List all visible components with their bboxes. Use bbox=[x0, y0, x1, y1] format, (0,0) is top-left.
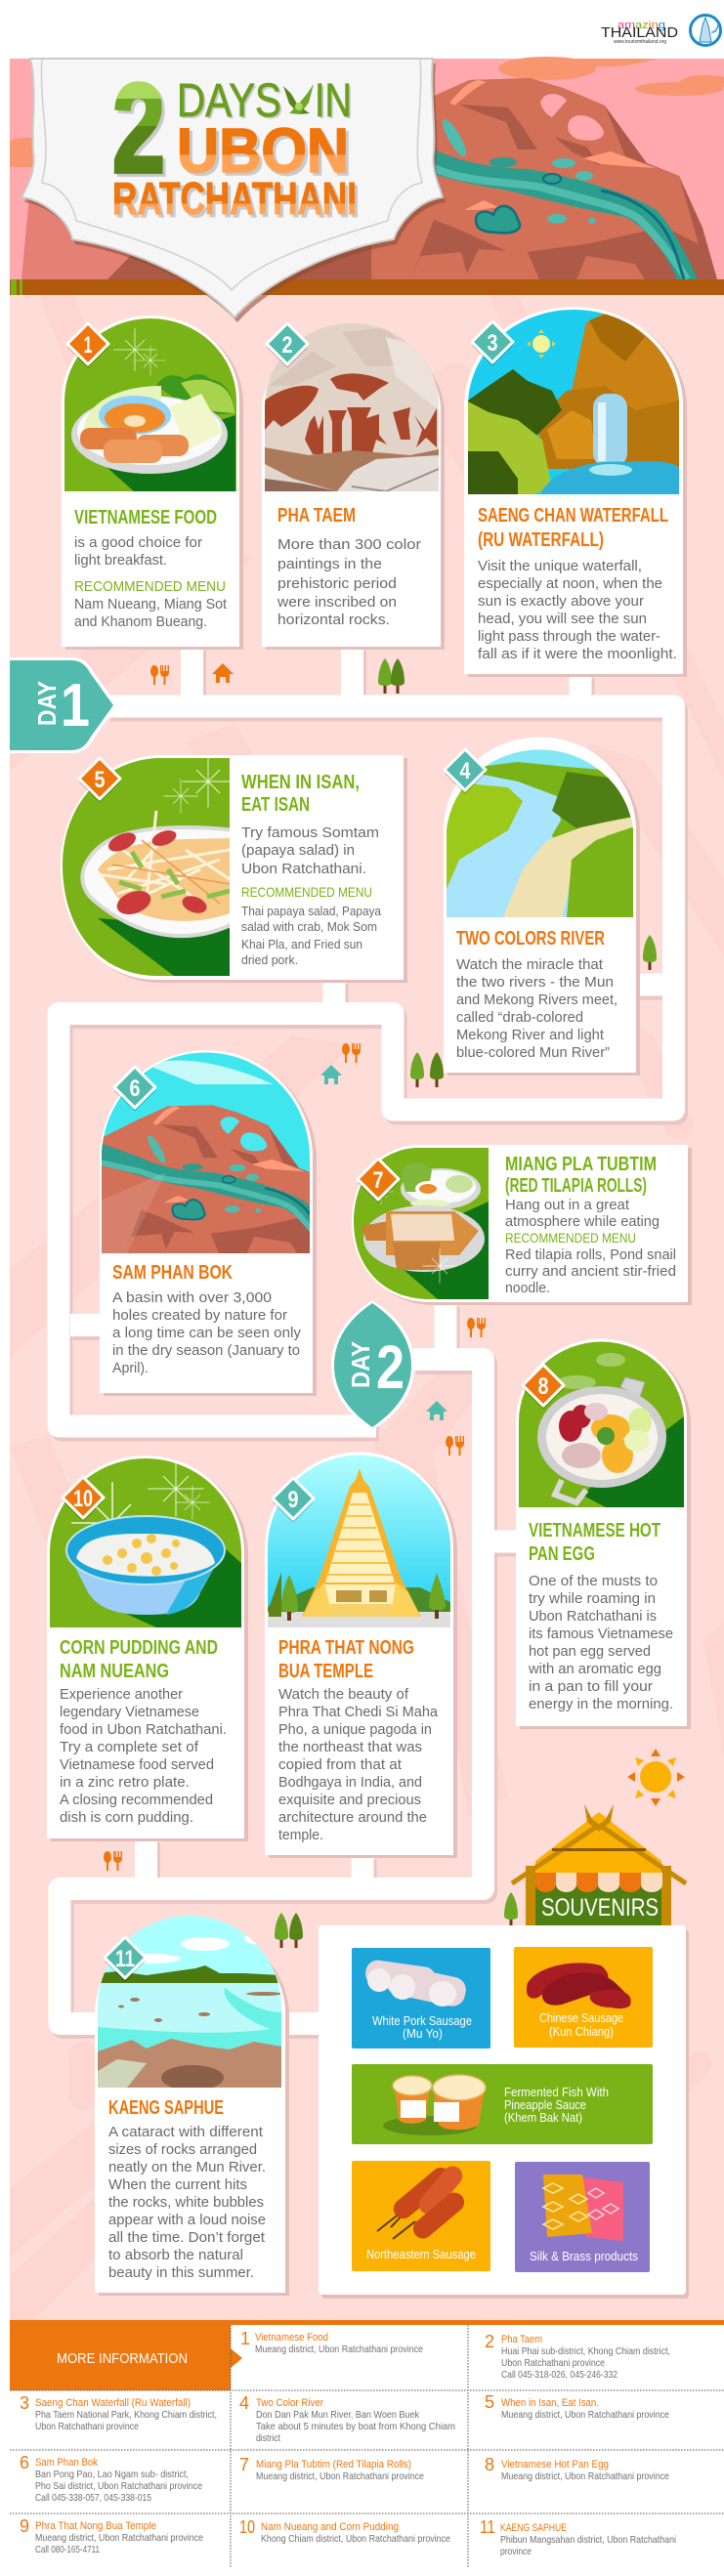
item 2: Call 045-318-026, 045-246-332 bbox=[501, 2369, 618, 2381]
item 4: district bbox=[256, 2432, 280, 2444]
body: all the time. Don’t forget bbox=[108, 2230, 265, 2246]
body bbox=[278, 1687, 439, 1843]
heading: TWO COLORS RIVER bbox=[456, 928, 605, 950]
icon: house 3 bbox=[426, 1401, 447, 1420]
body: light pass through the water- bbox=[478, 629, 660, 645]
badge 5: 5 bbox=[94, 767, 106, 793]
icon: trees 3 bbox=[275, 1913, 303, 1948]
item 3: Ubon Ratchathani province bbox=[35, 2421, 139, 2432]
amazing thailand logo: www.tourismthailand.org bbox=[614, 39, 666, 45]
panel: card 1 Vietnamese food bbox=[59, 313, 244, 650]
item 7: 7 bbox=[239, 2455, 249, 2474]
item 10: 10 bbox=[239, 2517, 255, 2537]
tile: northeastern sausage: Northeastern Sausage bbox=[366, 2247, 476, 2261]
item 7: Miang Pla Tubtim (Red Tilapia Rolls) bbox=[256, 2459, 411, 2470]
left rock bbox=[21, 195, 293, 279]
icon: house 1 bbox=[212, 663, 234, 683]
item 6: Pho Sai district, Ubon Ratchathani province bbox=[35, 2480, 202, 2492]
item 9: Mueang district, Ubon Ratchathani province bbox=[35, 2532, 203, 2544]
item 4: Take about 5 minutes by boat from Khong Chiam bbox=[256, 2421, 455, 2432]
body: in the dry season (January to bbox=[112, 1343, 300, 1359]
title text: RATCHATHANI bbox=[112, 173, 357, 224]
body: April). bbox=[112, 1361, 149, 1376]
illustration: waterfall bbox=[464, 305, 684, 496]
body: beauty in this summer. bbox=[108, 2265, 254, 2281]
badge 11: 11 bbox=[115, 1946, 135, 1972]
panel: card 8 Vietnamese hot pan egg bbox=[516, 1338, 691, 1729]
body: When the current hits bbox=[108, 2177, 247, 2193]
heading: PHRA THAT NONG bbox=[278, 1637, 414, 1659]
item 9: Phra That Nong Bua Temple bbox=[35, 2520, 156, 2532]
item 8 bbox=[485, 2455, 669, 2482]
item 4 bbox=[239, 2393, 455, 2444]
body: and Mekong Rivers meet, bbox=[456, 992, 618, 1008]
panel: card 7 Miang Pla Tubtim bbox=[352, 1145, 692, 1305]
recommended menu: Red tilapia rolls, Pond snail bbox=[505, 1247, 676, 1263]
body: hot pan egg served bbox=[529, 1644, 651, 1660]
heading bbox=[505, 1154, 657, 1197]
body: in a zinc retro plate. bbox=[60, 1775, 190, 1791]
body bbox=[478, 559, 677, 662]
panel: card 5 When in Isan bbox=[59, 752, 407, 983]
badge 6: 6 bbox=[129, 1076, 141, 1102]
body bbox=[60, 1687, 227, 1826]
icon: trees 1 bbox=[378, 658, 405, 694]
body: Pho, a unique pagoda in bbox=[278, 1722, 432, 1738]
title text: UBON bbox=[177, 115, 349, 186]
icon: restaurant 3 bbox=[467, 1318, 486, 1337]
item 1: Vietnamese Food bbox=[255, 2332, 328, 2344]
body bbox=[74, 535, 202, 569]
body: try while roaming in bbox=[529, 1591, 656, 1607]
item 4: 4 bbox=[239, 2393, 249, 2413]
item 10: Nam Nueang and Corn Pudding bbox=[261, 2521, 399, 2533]
badge 5 bbox=[79, 758, 120, 803]
body: blue-colored Mun River” bbox=[456, 1045, 610, 1061]
heading: WHEN IN ISAN, bbox=[241, 772, 360, 793]
heading: (RU WATERFALL) bbox=[478, 529, 604, 551]
badge 6 bbox=[114, 1067, 155, 1112]
body: atmosphere while eating bbox=[505, 1214, 660, 1230]
illustration: rock paintings bbox=[265, 323, 439, 491]
panel: souvenirs bbox=[319, 1925, 689, 2299]
awning bbox=[535, 1873, 662, 1892]
body: food in Ubon Ratchathani. bbox=[60, 1722, 227, 1738]
badge 1: 1 bbox=[84, 332, 92, 359]
icon: restaurant 4 bbox=[446, 1436, 464, 1456]
item 1: 1 bbox=[240, 2329, 250, 2348]
body: Phra That Chedi Si Maha bbox=[278, 1705, 439, 1720]
title text: UBON bbox=[180, 118, 352, 189]
item 3 bbox=[20, 2393, 217, 2432]
body: the two rivers - the Mun bbox=[456, 975, 614, 991]
body: the rocks, white bubbles bbox=[108, 2195, 264, 2211]
recommended menu: and Khanom Bueang. bbox=[74, 614, 207, 630]
body: is a good choice for bbox=[74, 535, 202, 551]
panel: more information bbox=[10, 2320, 724, 2567]
recommended menu bbox=[74, 578, 227, 630]
item 8: Mueang district, Ubon Ratchathani province bbox=[501, 2470, 669, 2482]
body: head, you will see the sun bbox=[478, 612, 647, 627]
badge 10: 10 bbox=[73, 1486, 93, 1512]
badge 7: 7 bbox=[373, 1167, 383, 1194]
body: Ubon Ratchathani is bbox=[529, 1609, 657, 1625]
item 10 bbox=[239, 2517, 450, 2545]
tile: white pork sausage bbox=[352, 1948, 490, 2048]
badge 11 bbox=[105, 1937, 146, 1982]
panel: card 3 Saeng Chan waterfall bbox=[464, 305, 687, 677]
recommended menu: Khai Pla, and Fried sun bbox=[241, 937, 362, 951]
body: the northeast that was bbox=[278, 1740, 422, 1755]
body bbox=[108, 2125, 266, 2281]
panel: card 4 Two colors river bbox=[444, 738, 640, 1076]
tile: fermented fish: Fermented Fish With bbox=[504, 2085, 609, 2099]
amazing thailand logo: THAILAND bbox=[601, 24, 678, 41]
icon: crossed nagas bbox=[283, 84, 314, 114]
heading: SAM PHAN BOK bbox=[112, 1262, 233, 1284]
item 4: Two Color River bbox=[256, 2397, 323, 2409]
heading: PAN EGG bbox=[529, 1543, 595, 1565]
recommended menu: Nam Nueang, Miang Sot bbox=[74, 597, 227, 612]
header logos bbox=[601, 16, 721, 45]
body: sizes of rocks arranged bbox=[108, 2142, 257, 2158]
body: temple. bbox=[278, 1828, 323, 1843]
body: energy in the morning. bbox=[529, 1697, 673, 1712]
heading bbox=[529, 1520, 660, 1565]
panel: card 9 Phra That Nong Bua temple bbox=[264, 1451, 457, 1858]
hero banner bbox=[10, 57, 724, 295]
heading: NAM NUEANG bbox=[60, 1661, 169, 1682]
body: Experience another bbox=[60, 1687, 183, 1703]
icon: restaurant 1 bbox=[150, 665, 169, 685]
tile: chinese sausage bbox=[514, 1947, 653, 2048]
item 8: Vietnamese Hot Pan Egg bbox=[501, 2459, 609, 2470]
panel: card 2 Pha Taem bbox=[259, 317, 445, 650]
body: called “drab-colored bbox=[456, 1010, 583, 1026]
body bbox=[505, 1198, 660, 1230]
heading bbox=[60, 1637, 218, 1682]
tile: chinese sausage: (Kun Chiang) bbox=[549, 2024, 614, 2039]
item 6: Call 045-338-057, 045-338-015 bbox=[35, 2492, 151, 2504]
body: light breakfast. bbox=[74, 553, 167, 569]
heading: EAT ISAN bbox=[241, 794, 310, 816]
item 11: KAENG SAPHUE bbox=[500, 2522, 567, 2534]
body: More than 300 color bbox=[277, 537, 421, 553]
icon: souvenir shop bbox=[512, 1804, 686, 1934]
recommended menu: RECOMMENDED MENU bbox=[505, 1230, 636, 1246]
tourism authority seal bbox=[690, 16, 721, 45]
tile: fermented fish: Pineapple Sauce bbox=[504, 2097, 586, 2112]
badge 9: 9 bbox=[287, 1487, 299, 1513]
body: Bodhgaya in India, and bbox=[278, 1775, 422, 1791]
tile: white pork sausage: White Pork Sausage bbox=[372, 2013, 472, 2028]
badge 9 bbox=[273, 1478, 314, 1523]
illustration: rock basin bbox=[102, 1053, 310, 1253]
tile: white pork sausage: (Mu Yo) bbox=[403, 2026, 443, 2041]
icon: restaurant 2 bbox=[342, 1043, 361, 1063]
body: Mekong River and light bbox=[456, 1028, 604, 1043]
icon: house 2 bbox=[320, 1065, 342, 1084]
item 1 bbox=[240, 2329, 423, 2355]
heading bbox=[278, 1637, 414, 1682]
rock with river bbox=[107, 78, 717, 279]
heading: MIANG PLA TUBTIM bbox=[505, 1154, 657, 1175]
title text: DAYS bbox=[177, 75, 281, 127]
body: copied from that at bbox=[278, 1757, 402, 1773]
heading: CORN PUDDING AND bbox=[60, 1637, 218, 1659]
body: to absorb the natural bbox=[108, 2248, 243, 2263]
recommended menu: RECOMMENDED MENU bbox=[241, 884, 372, 900]
badge 7 bbox=[358, 1159, 399, 1204]
body: especially at noon, when the bbox=[478, 576, 662, 592]
illustration: hot pan egg bbox=[516, 1338, 687, 1509]
recommended menu: RECOMMENDED MENU bbox=[74, 578, 226, 595]
tile: silk and brass: Silk & Brass products bbox=[530, 2249, 638, 2263]
title text: 2 bbox=[112, 57, 165, 199]
tile: fermented fish bbox=[352, 2064, 653, 2144]
body: holes created by nature for bbox=[112, 1308, 287, 1324]
body: Ubon Ratchathani. bbox=[241, 862, 366, 877]
item 11: 11 bbox=[480, 2517, 495, 2537]
body: (papaya salad) in bbox=[241, 843, 355, 859]
recommended menu bbox=[505, 1230, 676, 1296]
amazing thailand logo: amazing bbox=[618, 20, 665, 31]
body bbox=[241, 825, 379, 877]
body: were inscribed on bbox=[277, 595, 397, 611]
badge 10 bbox=[63, 1477, 104, 1522]
badge: day 1: DAY bbox=[32, 681, 62, 726]
item 8: 8 bbox=[485, 2455, 494, 2474]
title text: DAYS bbox=[179, 77, 283, 129]
body: legendary Vietnamese bbox=[60, 1705, 199, 1720]
item 5 bbox=[485, 2392, 669, 2421]
badge: day 2: 2 bbox=[376, 1333, 405, 1402]
body: prehistoric period bbox=[277, 576, 397, 592]
icon: trees 2 bbox=[410, 1052, 444, 1087]
body: its famous Vietnamese bbox=[529, 1626, 673, 1642]
more information heading bbox=[10, 2320, 242, 2390]
recommended menu: curry and ancient stir-fried bbox=[505, 1264, 676, 1280]
illustration: tilapia rolls bbox=[352, 1145, 490, 1303]
panel: card 11 Kaeng Saphue bbox=[95, 1913, 289, 2296]
sign text: SOUVENIRS bbox=[541, 1894, 659, 1921]
tile: fermented fish: (Khem Bak Nat) bbox=[504, 2110, 582, 2125]
body: paintings in the bbox=[277, 557, 382, 572]
body bbox=[528, 1574, 673, 1712]
item 1: Mueang district, Ubon Ratchathani province bbox=[255, 2344, 423, 2355]
item 2: Pha Taem bbox=[501, 2334, 542, 2345]
body: A cataract with different bbox=[108, 2125, 263, 2140]
item 3: 3 bbox=[20, 2393, 29, 2413]
body: dish is corn pudding. bbox=[60, 1810, 193, 1826]
title text: IN bbox=[315, 75, 352, 127]
body: sun is exactly above your bbox=[478, 594, 644, 610]
body: Watch the beauty of bbox=[278, 1687, 409, 1703]
item 3: Saeng Chan Waterfall (Ru Waterfall) bbox=[35, 2397, 191, 2409]
item 2 bbox=[485, 2332, 670, 2381]
badge: day 2 bbox=[331, 1300, 414, 1430]
body: Try famous Somtam bbox=[241, 825, 379, 841]
item 6 bbox=[20, 2453, 202, 2504]
icon: sun bbox=[627, 1749, 685, 1806]
body: horizontal rocks. bbox=[277, 612, 390, 628]
icon: restaurant 5 bbox=[104, 1851, 122, 1871]
body: Watch the miracle that bbox=[456, 957, 603, 973]
body bbox=[277, 537, 421, 628]
tile: silk and brass bbox=[515, 2162, 650, 2272]
heading: BUA TEMPLE bbox=[278, 1661, 373, 1682]
item 9: 9 bbox=[20, 2516, 29, 2536]
badge: day 2: DAY bbox=[346, 1341, 375, 1388]
more information heading: MORE INFORMATION bbox=[57, 2350, 188, 2367]
badge 8: 8 bbox=[537, 1373, 549, 1400]
title text: RATCHATHANI bbox=[115, 176, 360, 227]
item 6: 6 bbox=[20, 2453, 29, 2472]
body: exquisite and precious bbox=[278, 1793, 421, 1808]
body: fall as if it were the moonlight. bbox=[478, 647, 677, 662]
item 7 bbox=[239, 2455, 424, 2482]
heading: (RED TILAPIA ROLLS) bbox=[505, 1175, 647, 1197]
recommended menu: salad with crab, Mok Som bbox=[241, 919, 377, 934]
item 3: Pha Taem National Park, Khong Chiam district, bbox=[35, 2409, 217, 2421]
body: One of the musts to bbox=[529, 1574, 658, 1589]
item 2: Huai Phai sub-district, Khong Chiam district, bbox=[501, 2345, 670, 2357]
heading: PHA TAEM bbox=[277, 505, 356, 527]
illustration: cataract bbox=[95, 1913, 285, 2090]
item 11: province bbox=[500, 2546, 532, 2557]
body bbox=[456, 957, 618, 1061]
recommended menu bbox=[241, 884, 382, 967]
illustration: corn pudding bowl bbox=[47, 1454, 244, 1629]
body: with an aromatic egg bbox=[528, 1662, 661, 1677]
badge 2 bbox=[267, 323, 308, 368]
route path bbox=[59, 647, 676, 2028]
tile: chinese sausage: Chinese Sausage bbox=[539, 2010, 623, 2025]
body: Try a complete set of bbox=[60, 1740, 199, 1755]
item 2: 2 bbox=[485, 2332, 494, 2351]
badge 3: 3 bbox=[487, 330, 498, 357]
item 4: Don Dan Pak Mun River, Ban Woen Buek bbox=[256, 2409, 420, 2421]
body: Vietnamese food served bbox=[60, 1757, 214, 1773]
item 11: Phibun Mangsahan district, Ubon Ratchathani bbox=[500, 2534, 676, 2546]
icon: tree near shop bbox=[504, 1892, 518, 1927]
body: appear with a loud noise bbox=[108, 2213, 266, 2228]
title text: IN bbox=[317, 77, 354, 129]
heading bbox=[241, 772, 360, 816]
badge: day 1 bbox=[10, 657, 117, 753]
title plate bbox=[21, 57, 446, 322]
body: Hang out in a great bbox=[505, 1198, 629, 1213]
brown band bbox=[10, 279, 724, 295]
heading bbox=[478, 505, 668, 551]
body: Visit the unique waterfall, bbox=[478, 559, 642, 574]
page background bbox=[10, 295, 724, 2344]
icon: tree near river bbox=[643, 935, 657, 970]
badge 8 bbox=[523, 1365, 564, 1410]
item 5: 5 bbox=[485, 2392, 494, 2412]
recommended menu: Thai papaya salad, Papaya bbox=[241, 904, 382, 918]
panel: card 6 Sam Phan Bok bbox=[100, 1050, 317, 1396]
heading: VIETNAMESE FOOD bbox=[74, 507, 217, 528]
body: A closing recommended bbox=[60, 1793, 213, 1808]
illustration: papaya salad bbox=[59, 752, 234, 982]
illustration: pagoda bbox=[264, 1451, 454, 1629]
item 11 bbox=[480, 2517, 676, 2557]
heading: VIETNAMESE HOT bbox=[529, 1520, 660, 1541]
body: a long time can be seen only bbox=[112, 1326, 302, 1341]
illustration: river bbox=[445, 738, 635, 919]
body: in a pan to fill your bbox=[529, 1679, 653, 1695]
panel: card 10 corn pudding bbox=[47, 1454, 248, 1841]
heading: KAENG SAPHUE bbox=[108, 2097, 224, 2119]
badge 4 bbox=[445, 749, 486, 794]
body: A basin with over 3,000 bbox=[112, 1290, 272, 1306]
badge 4: 4 bbox=[459, 758, 471, 784]
title text: 2 bbox=[115, 60, 168, 202]
item 9: Call 080-165-4711 bbox=[35, 2544, 100, 2555]
item 5: Mueang district, Ubon Ratchathani province bbox=[501, 2409, 669, 2421]
item 10: Khong Chiam district, Ubon Ratchathani province bbox=[261, 2533, 450, 2545]
badge 3 bbox=[472, 321, 513, 366]
item 6: Sam Phan Bok bbox=[35, 2457, 98, 2469]
amazing thailand logo bbox=[601, 20, 678, 45]
item 2: Ubon Ratchathani province bbox=[501, 2357, 605, 2369]
item 9 bbox=[20, 2516, 203, 2555]
item 7: Mueang district, Ubon Ratchathani province bbox=[256, 2470, 424, 2482]
badge 1 bbox=[67, 323, 108, 368]
item 6: Ban Pong Pao, Lao Ngam sub- district, bbox=[35, 2469, 189, 2480]
title text bbox=[112, 57, 360, 227]
body: neatly on the Mun River. bbox=[108, 2160, 266, 2175]
body bbox=[112, 1290, 302, 1376]
badge 2: 2 bbox=[281, 332, 293, 359]
clouds bbox=[10, 57, 724, 167]
tile: northeastern sausage bbox=[352, 2161, 490, 2271]
recommended menu: dried pork. bbox=[241, 952, 298, 967]
illustration: vietnamese food bbox=[64, 318, 236, 491]
badge: day 1: 1 bbox=[61, 672, 90, 739]
item 5: When in Isan, Eat Isan. bbox=[501, 2397, 599, 2409]
body: architecture around the bbox=[278, 1810, 427, 1826]
recommended menu: noodle. bbox=[505, 1281, 550, 1296]
